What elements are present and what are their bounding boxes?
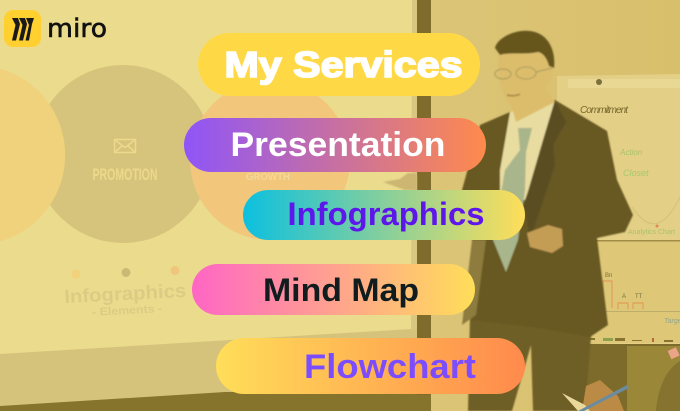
logo: miro	[4, 10, 107, 47]
icon: miro mark	[4, 10, 41, 47]
slide circle: promotion	[34, 65, 212, 243]
whiteboard	[557, 74, 680, 346]
slide dots	[72, 266, 180, 278]
trousers	[468, 315, 592, 411]
projection screen	[0, 0, 412, 354]
whiteboard: Analytics Chart	[628, 229, 675, 236]
whiteboard: Commitment	[580, 105, 629, 116]
raised hand on screen	[383, 173, 417, 190]
glasses	[495, 67, 552, 79]
slide title: infographics elements: - Elements -	[92, 303, 163, 319]
lower right room	[585, 344, 680, 411]
whiteboard: Action	[619, 148, 643, 157]
audience hand with pen	[562, 380, 629, 411]
neck and face	[498, 45, 555, 122]
slide label: promotion: PROMOTION	[92, 165, 158, 184]
pill: Flowchart: Flowchart	[304, 348, 476, 386]
pill: Mind Map: Mind Map	[263, 272, 419, 308]
whiteboard: Bn	[605, 273, 612, 279]
mouth	[507, 94, 520, 96]
pill: Presentation	[184, 118, 486, 172]
slide label: growth: GROWTH	[246, 172, 290, 183]
slide circle: left	[0, 68, 65, 242]
pill: My Services: My Services	[224, 44, 462, 85]
pill: My Services	[198, 33, 480, 96]
icon: envelope	[114, 140, 136, 152]
whiteboard: TT	[635, 294, 643, 300]
wordmark: miro	[47, 14, 107, 44]
slide title: infographics elements: Infographics	[64, 281, 187, 308]
shirt	[500, 98, 556, 200]
hand	[527, 225, 563, 253]
pill: Presentation: Presentation	[230, 126, 446, 164]
lapel	[524, 100, 566, 240]
jacket flap	[462, 240, 486, 325]
pill: Infographics	[243, 190, 525, 240]
whiteboard: Closet	[623, 168, 649, 178]
jacket	[462, 100, 633, 337]
hair	[495, 31, 554, 68]
whiteboard: A	[622, 294, 626, 300]
presenter	[383, 31, 633, 411]
tie	[493, 128, 532, 272]
slide title: infographics elements	[64, 281, 187, 320]
pill: Flowchart	[216, 338, 525, 394]
pill: Infographics: Infographics	[288, 196, 484, 232]
pill: Mind Map	[192, 264, 475, 315]
slide circle: growth	[190, 80, 350, 240]
